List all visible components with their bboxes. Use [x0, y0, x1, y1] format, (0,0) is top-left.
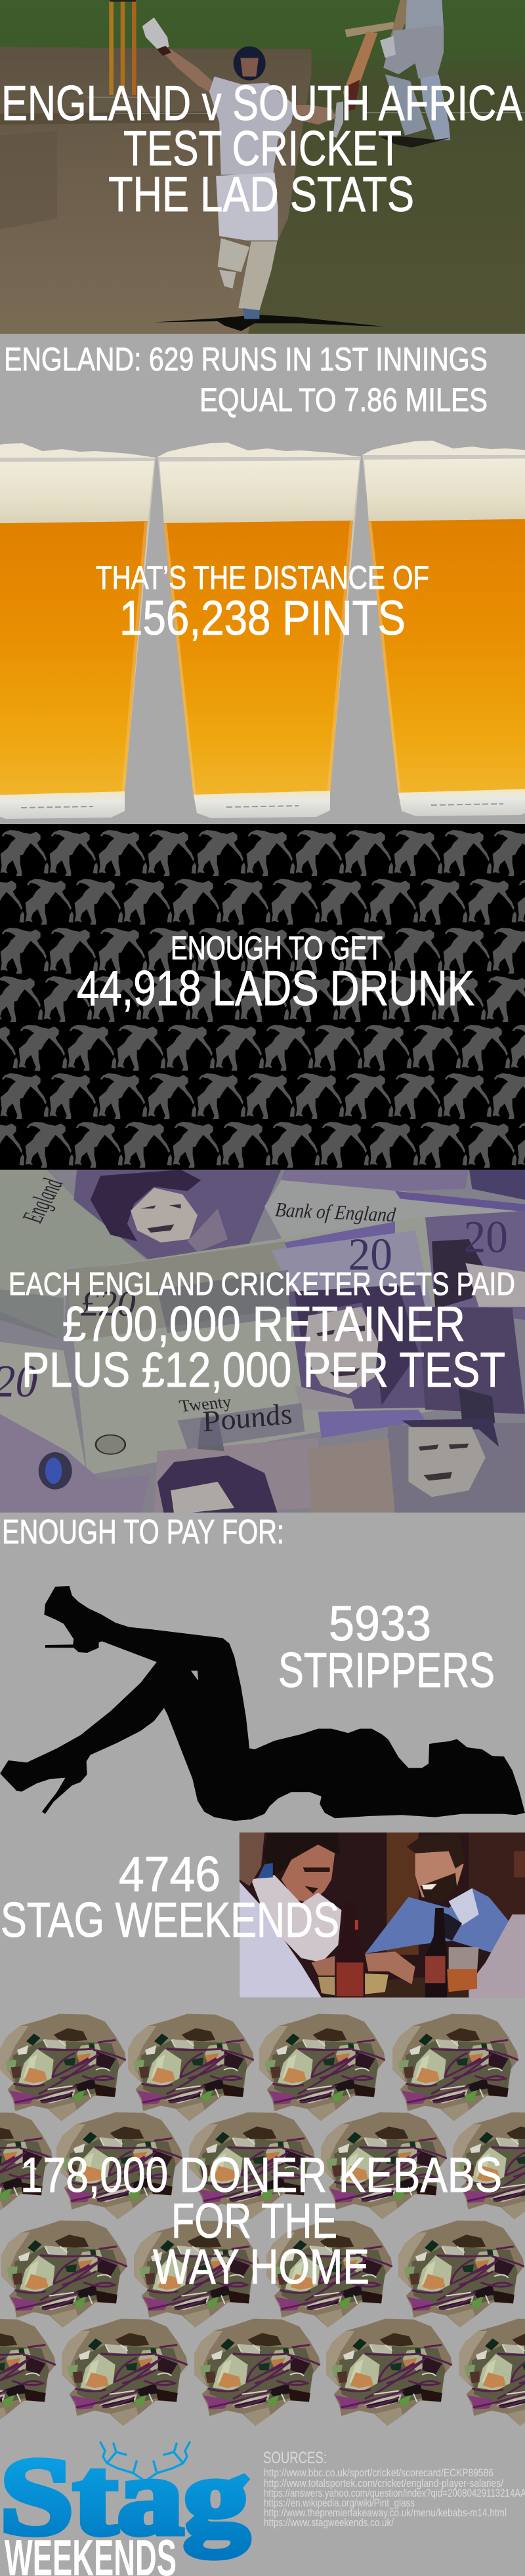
panel: enough to pay for [0, 1513, 525, 1821]
footer: stag weekends logo [0, 2436, 249, 2576]
pints text [96, 559, 429, 645]
stag party photo [240, 1833, 525, 1998]
stag weekends stat [1, 1846, 339, 1947]
stumps [109, 0, 136, 95]
stag weekends stat: STAG WEEKENDS [1, 1892, 339, 1947]
lads text: ENOUGH TO GET [171, 930, 383, 966]
panel: player pay, banknotes [0, 1167, 525, 1515]
icon: stripper silhouette [0, 1586, 525, 1821]
pay text: £700,000 RETAINER [62, 1296, 465, 1351]
banknote lettering: 20 [464, 1212, 508, 1262]
pints text: 156,238 PINTS [119, 591, 406, 645]
lads text [77, 930, 474, 1016]
kebab text: FOR THE [171, 2193, 337, 2248]
runs text [4, 341, 488, 418]
kebab text: WAY HOME [153, 2239, 369, 2294]
kebab grid [0, 2014, 525, 2426]
panel: runs in first innings [0, 341, 525, 819]
strippers stat [278, 1596, 495, 1697]
banknote lettering: England [15, 1176, 70, 1226]
kebab text [20, 2147, 502, 2294]
banknote lettering [0, 1176, 508, 1438]
strippers stat: 5933 [329, 1596, 431, 1651]
far batsman [345, 0, 452, 148]
pay text [9, 1267, 515, 1397]
banknote lettering: 20 [348, 1229, 392, 1280]
sources list [263, 2449, 525, 2529]
banknote lettering: Pounds [198, 1397, 295, 1438]
banknote lettering: Twenty [178, 1393, 234, 1416]
title text: THE LAD STATS [108, 167, 414, 222]
sources list: SOURCES: [263, 2449, 327, 2467]
icon: three pints of beer [0, 441, 525, 819]
hero photo [0, 0, 525, 334]
pattern of drunk lad silhouettes [0, 827, 525, 1168]
heading: ENOUGH TO PAY FOR: [2, 1513, 284, 1551]
title text [1, 75, 522, 222]
title text: TEST CRICKET [123, 121, 402, 176]
panel: doner kebabs [0, 2014, 525, 2426]
pints text: THAT’S THE DISTANCE OF [96, 559, 429, 596]
banknote lettering: Bank of England [274, 1198, 397, 1226]
icon: antlers [100, 2442, 190, 2482]
panel: lads drunk [0, 824, 525, 1170]
sources list: https://www.stagweekends.co.uk/ [264, 2517, 394, 2529]
panel: hero cricket photo and title [0, 0, 525, 334]
banknote lettering: £20 [80, 1284, 136, 1324]
sources list: https://en.wikipedia.org/wiki/Pint_glass [264, 2497, 415, 2509]
main batsman [142, 18, 385, 331]
stag weekends stat: 4746 [119, 1846, 220, 1901]
panel: stag weekends [1, 1833, 525, 1998]
banknotes collage [0, 1167, 525, 1515]
logo word Stag: Stag [0, 2436, 249, 2558]
